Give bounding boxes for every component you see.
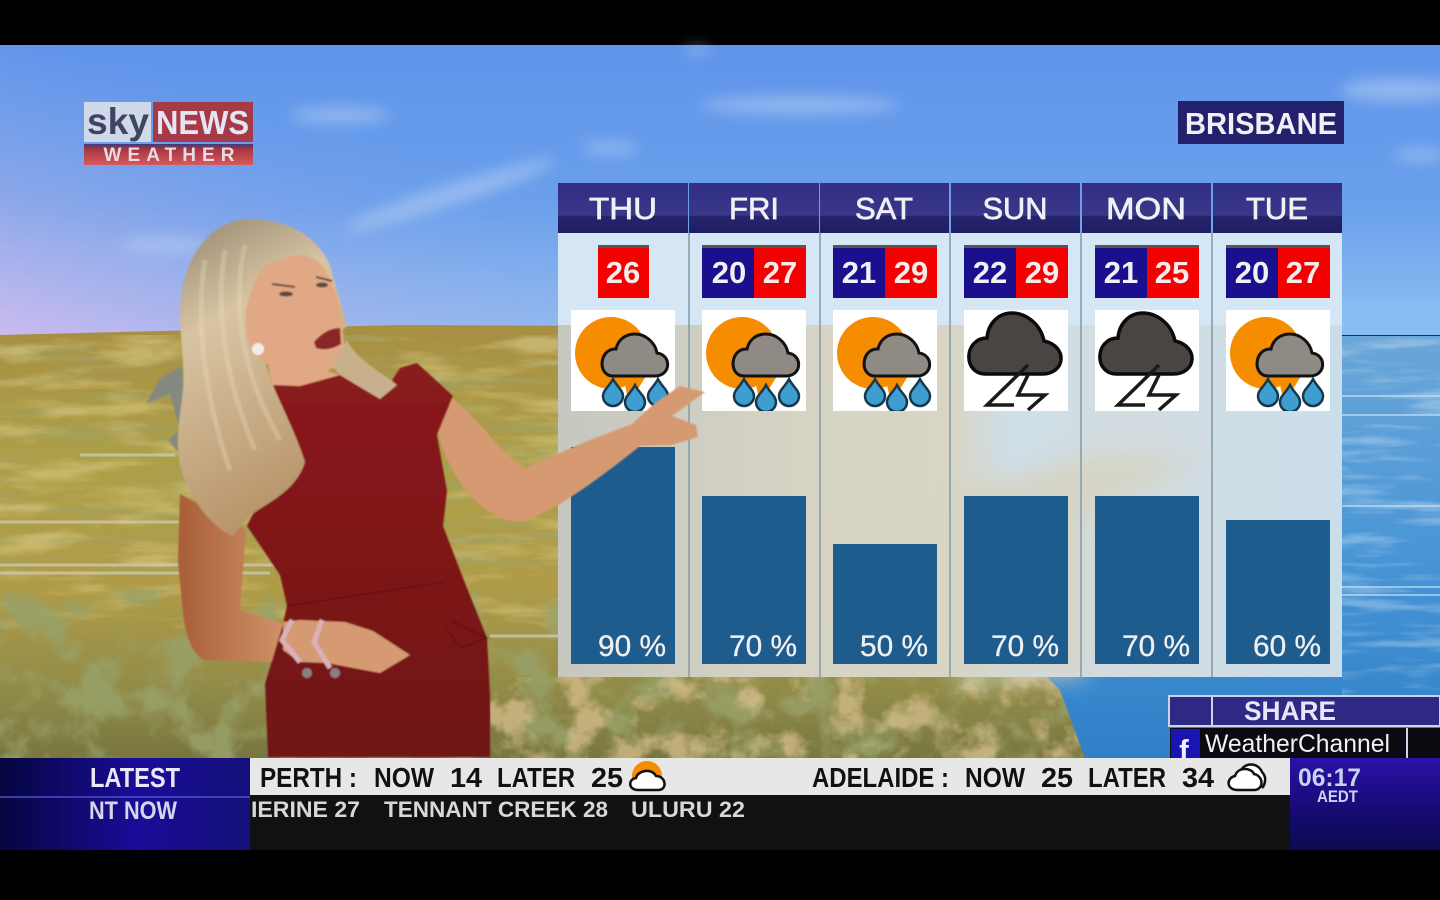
column: Monday: 21 [1104, 255, 1138, 290]
share box: f [1179, 735, 1189, 767]
forecast panel [558, 183, 1342, 677]
land and sea map backdrop [0, 300, 1440, 760]
ticker: city temperatures strip: PERTH : [260, 762, 357, 793]
right hair tress [332, 340, 397, 399]
ticker: left label block: LATEST [90, 762, 180, 793]
column: Tuesday: 27 [1286, 255, 1320, 290]
dress [247, 363, 490, 757]
column: Friday: 70 % [729, 630, 797, 663]
column: Friday [689, 183, 819, 664]
column: Thursday: 90 % [598, 630, 666, 663]
column: Saturday [820, 183, 949, 664]
ticker: left label block: NT NOW [89, 797, 177, 825]
forearm and hand at waist [283, 620, 410, 673]
column: Friday: 27 [763, 255, 797, 290]
ticker: city temperatures strip: NOW [374, 762, 434, 793]
facial features [252, 277, 341, 355]
ticker: city temperatures strip: 34 [1182, 762, 1214, 793]
ticker: scrolling regional temperatures [250, 795, 1290, 850]
column: Saturday: 29 [894, 255, 928, 290]
ticker: city temperatures strip: ADELAIDE : [812, 762, 949, 793]
share box [1169, 696, 1440, 767]
Sky News Weather logo: sky [87, 101, 149, 142]
ticker: city temperatures strip: 14 [450, 762, 482, 793]
Sky News Weather logo [84, 101, 253, 166]
column: Monday: 25 [1155, 255, 1189, 290]
column: Thursday: 26 [606, 255, 640, 290]
hair [178, 219, 347, 536]
location label: BRISBANE [1185, 106, 1337, 141]
left arm [178, 494, 284, 662]
ticker: city temperatures strip: LATER [1088, 762, 1166, 793]
ticker: scrolling regional temperatures: ULURU 22 [631, 797, 745, 822]
ticker: city temperatures strip: 25 [1041, 762, 1073, 793]
face and neck [246, 255, 345, 386]
column: Friday: 20 [712, 255, 746, 290]
column: Sunday: 22 [973, 255, 1007, 290]
column: Sunday: 70 % [991, 630, 1059, 663]
sky backdrop [0, 45, 1440, 345]
clock block [1290, 758, 1440, 850]
clock block: AEDT [1317, 787, 1359, 806]
ticker: city temperatures strip: 25 [591, 762, 623, 793]
column: Saturday: 21 [842, 255, 876, 290]
back hair wisps [146, 366, 190, 480]
ticker: city temperatures strip: LATER [497, 762, 575, 793]
icon: sun behind cloud [630, 761, 665, 791]
hair strands [201, 245, 280, 470]
ticker: scrolling regional temperatures: IERINE 27 [251, 797, 360, 822]
dress seam and peplum [287, 582, 487, 648]
column: Saturday: SAT [855, 191, 913, 226]
bracelets [282, 620, 340, 678]
column: Monday: 70 % [1122, 630, 1190, 663]
column: Sunday: 29 [1025, 255, 1059, 290]
column: Monday [1082, 183, 1211, 664]
presenter figure [146, 219, 705, 757]
right arm and hand [438, 386, 705, 522]
column: Monday: MON [1106, 191, 1186, 226]
panel backing [558, 233, 1342, 677]
column: Saturday: 50 % [860, 630, 928, 663]
ticker: scrolling regional temperatures: TENNANT CREEK 28 [384, 797, 608, 822]
ticker: city temperatures strip [250, 758, 1290, 795]
Sky News Weather logo: WEATHER [104, 145, 235, 166]
column: Tuesday [1213, 183, 1342, 664]
column: Thursday: THU [589, 191, 657, 226]
column: Tuesday: 20 [1235, 255, 1269, 290]
column: Sunday: SUN [982, 191, 1048, 226]
column: Sunday [951, 183, 1080, 664]
column: Tuesday: 60 % [1253, 630, 1321, 663]
ticker: city temperatures strip: NOW [965, 762, 1025, 793]
column: Friday: FRI [729, 191, 779, 226]
icon: double cloud [1229, 764, 1265, 790]
Sky News Weather logo: NEWS [156, 104, 249, 141]
column: Thursday [558, 183, 688, 664]
column: Tuesday: TUE [1246, 191, 1308, 226]
ticker: left label block [0, 758, 250, 850]
share box: WeatherChannel [1205, 730, 1390, 758]
clock block: 06:17 [1298, 764, 1361, 792]
share box: SHARE [1244, 696, 1336, 726]
